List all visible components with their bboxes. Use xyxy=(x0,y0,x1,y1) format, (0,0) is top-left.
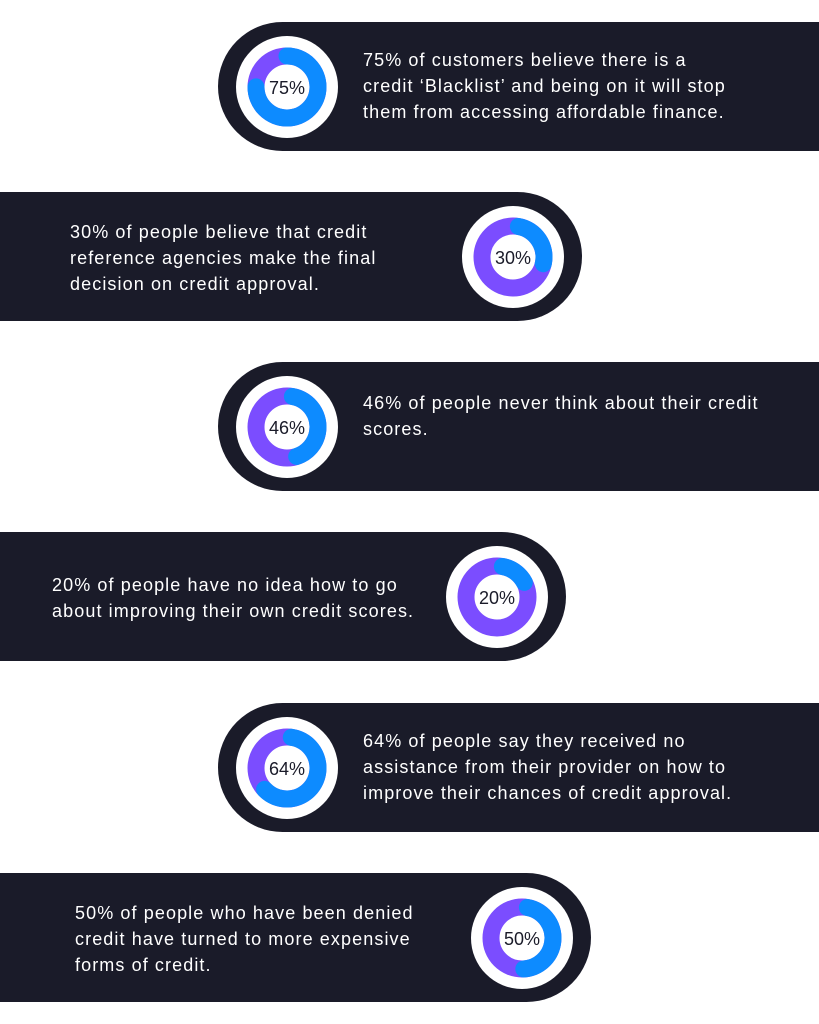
text: assistance from their provider on how to xyxy=(363,757,726,777)
donut 30% xyxy=(462,206,564,308)
text: 64% of people say they received no xyxy=(363,731,686,751)
text xyxy=(75,903,414,975)
donut 64% xyxy=(236,717,338,819)
text: 75% of customers believe there is a xyxy=(363,50,687,70)
panel: no assistance 64% xyxy=(218,703,819,832)
text: credit have turned to more expensive xyxy=(75,929,411,949)
text: credit ‘Blacklist’ and being on it will stop xyxy=(363,76,726,96)
text: 20% of people have no idea how to go xyxy=(52,575,398,595)
text: reference agencies make the final xyxy=(70,248,376,268)
donut 30%: 30% xyxy=(495,248,531,268)
panel: never think 46% xyxy=(218,362,819,491)
donut 20% xyxy=(446,546,548,648)
panel: no idea 20% xyxy=(0,532,566,661)
donut 50%: 50% xyxy=(504,929,540,949)
text xyxy=(363,731,732,803)
text xyxy=(363,50,726,122)
donut 75% xyxy=(236,36,338,138)
panel: blacklist 75% xyxy=(218,22,819,151)
donut 75%: 75% xyxy=(269,78,305,98)
text: scores. xyxy=(363,419,429,439)
panel: agencies 30% xyxy=(0,192,582,321)
text xyxy=(363,393,759,439)
text xyxy=(52,575,414,621)
text: them from accessing affordable finance. xyxy=(363,102,725,122)
donut 64%: 64% xyxy=(269,759,305,779)
text: 50% of people who have been denied xyxy=(75,903,414,923)
donut 50% xyxy=(471,887,573,989)
donut 20%: 20% xyxy=(479,588,515,608)
text: about improving their own credit scores. xyxy=(52,601,414,621)
donut 46%: 46% xyxy=(269,418,305,438)
text: forms of credit. xyxy=(75,955,212,975)
text: improve their chances of credit approval. xyxy=(363,783,732,803)
text: decision on credit approval. xyxy=(70,274,320,294)
donut 46% xyxy=(236,376,338,478)
text: 30% of people believe that credit xyxy=(70,222,367,242)
panel: expensive credit 50% xyxy=(0,873,591,1002)
text: 46% of people never think about their credit xyxy=(363,393,759,413)
text xyxy=(70,222,376,294)
